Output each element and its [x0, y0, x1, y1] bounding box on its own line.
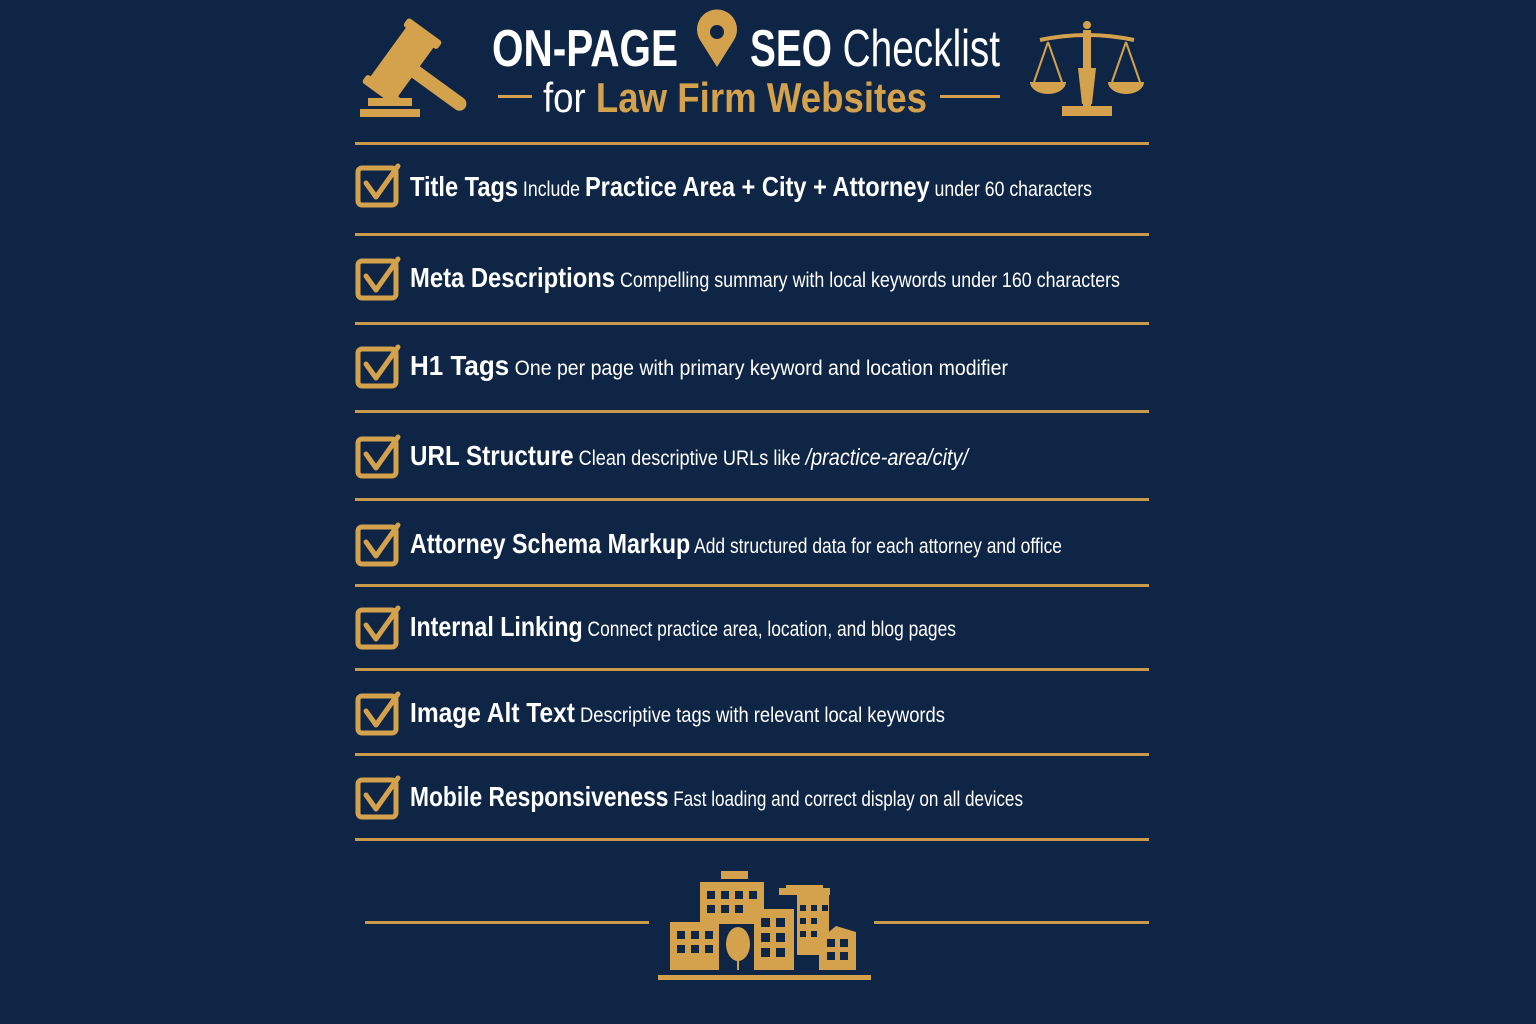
item: internal linking: Internal Linking Connect practice area, location, and blog pages: [410, 611, 956, 642]
item: h1 tags: H1 Tags One per page with primary keyword and location modifier: [410, 350, 1008, 381]
icon: location pin: [697, 9, 737, 67]
item: meta descriptions: [358, 259, 1120, 298]
item: attorney schema: [358, 525, 1062, 564]
subtitle: for Law Firm Websites: [543, 74, 927, 121]
item: h1 tags: [358, 347, 1008, 386]
item: mobile responsiveness: [358, 778, 1023, 817]
title: [492, 9, 1000, 78]
icon: city buildings: [658, 871, 871, 980]
title: SEO Checklist: [750, 20, 1000, 78]
item: internal linking: [358, 608, 956, 647]
footer lines: [365, 921, 1149, 924]
item: url structure: URL Structure Clean descriptive URLs like /practice-area/city/: [410, 440, 970, 471]
item: image alt text: [358, 694, 945, 733]
icon: scales of justice: [1030, 21, 1144, 116]
item: title tags: Title Tags Include Practice Area + City + Attorney under 60 characters: [410, 171, 1092, 202]
item: image alt text: Image Alt Text Descriptive tags with relevant local keywords: [410, 697, 945, 728]
dividers: [355, 142, 1149, 841]
item: attorney schema: Attorney Schema Markup Add structured data for each attorney and office: [410, 528, 1062, 559]
title: ON-PAGE: [492, 20, 678, 78]
item: meta descriptions: Meta Descriptions Compelling summary with local keywords under 160 characters: [410, 262, 1120, 293]
icon: gavel: [360, 17, 489, 140]
item: mobile responsiveness: Mobile Responsiveness Fast loading and correct display on all devices: [410, 781, 1023, 812]
checklist items: [358, 166, 1120, 817]
